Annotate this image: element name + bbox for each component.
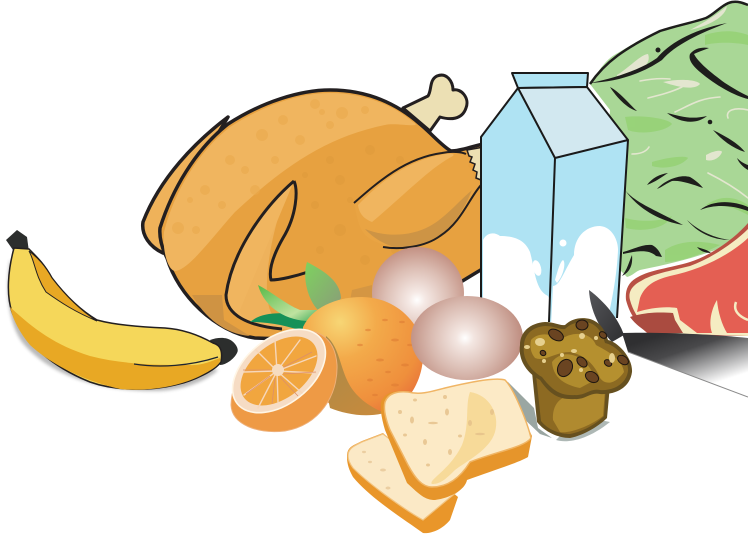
front bread slice <box>381 379 532 500</box>
banana body <box>8 248 222 389</box>
milk carton <box>481 73 628 325</box>
orange half <box>217 312 341 432</box>
chicken skin texture <box>172 99 369 234</box>
lettuce top outline <box>590 2 748 84</box>
roast chicken <box>143 90 484 338</box>
cut face pulp <box>228 323 330 419</box>
muffin nuts <box>539 320 630 385</box>
muffin top <box>520 318 632 399</box>
back bread slice <box>347 433 458 533</box>
carton left panel <box>481 88 555 322</box>
steak <box>626 223 748 336</box>
cut face pith <box>217 312 341 430</box>
lettuce light patches <box>625 31 748 262</box>
egg: back <box>372 247 464 339</box>
knife blade <box>622 333 748 397</box>
banana stem <box>6 230 29 252</box>
muffin shadow <box>500 382 610 441</box>
segment membranes <box>243 352 316 404</box>
carton right panel <box>549 140 628 322</box>
banana <box>6 230 238 391</box>
muffin oats <box>524 333 615 372</box>
upright leaf <box>305 262 341 310</box>
orange leaves <box>250 262 341 332</box>
chicken leg torn edge <box>467 147 484 180</box>
dark leaf <box>250 313 320 332</box>
banana inner ridge <box>29 251 97 321</box>
light leaf <box>258 285 317 321</box>
whole orange <box>303 297 423 415</box>
chicken lower shade <box>192 295 250 336</box>
chicken front wing <box>226 181 305 332</box>
muffin base <box>532 372 610 438</box>
knife <box>589 290 748 397</box>
carton top flap <box>512 73 588 88</box>
chicken highlight <box>164 93 416 271</box>
chicken leg <box>354 151 481 246</box>
egg: front <box>411 296 523 380</box>
banana shadow <box>8 260 218 391</box>
knife fin <box>589 290 624 342</box>
chicken back wing <box>143 117 228 253</box>
segment lines <box>244 340 316 408</box>
lettuce <box>590 2 748 277</box>
lettuce dark creases <box>590 23 748 276</box>
carton roof <box>518 87 628 158</box>
muffin <box>520 318 632 438</box>
spilled milk <box>483 233 550 325</box>
chicken body <box>160 90 484 338</box>
orange half rind <box>231 330 337 432</box>
banana tip <box>210 338 238 365</box>
drumstick bone <box>403 75 467 131</box>
banana shaded underside <box>10 307 220 390</box>
lettuce pale veins <box>632 79 748 198</box>
